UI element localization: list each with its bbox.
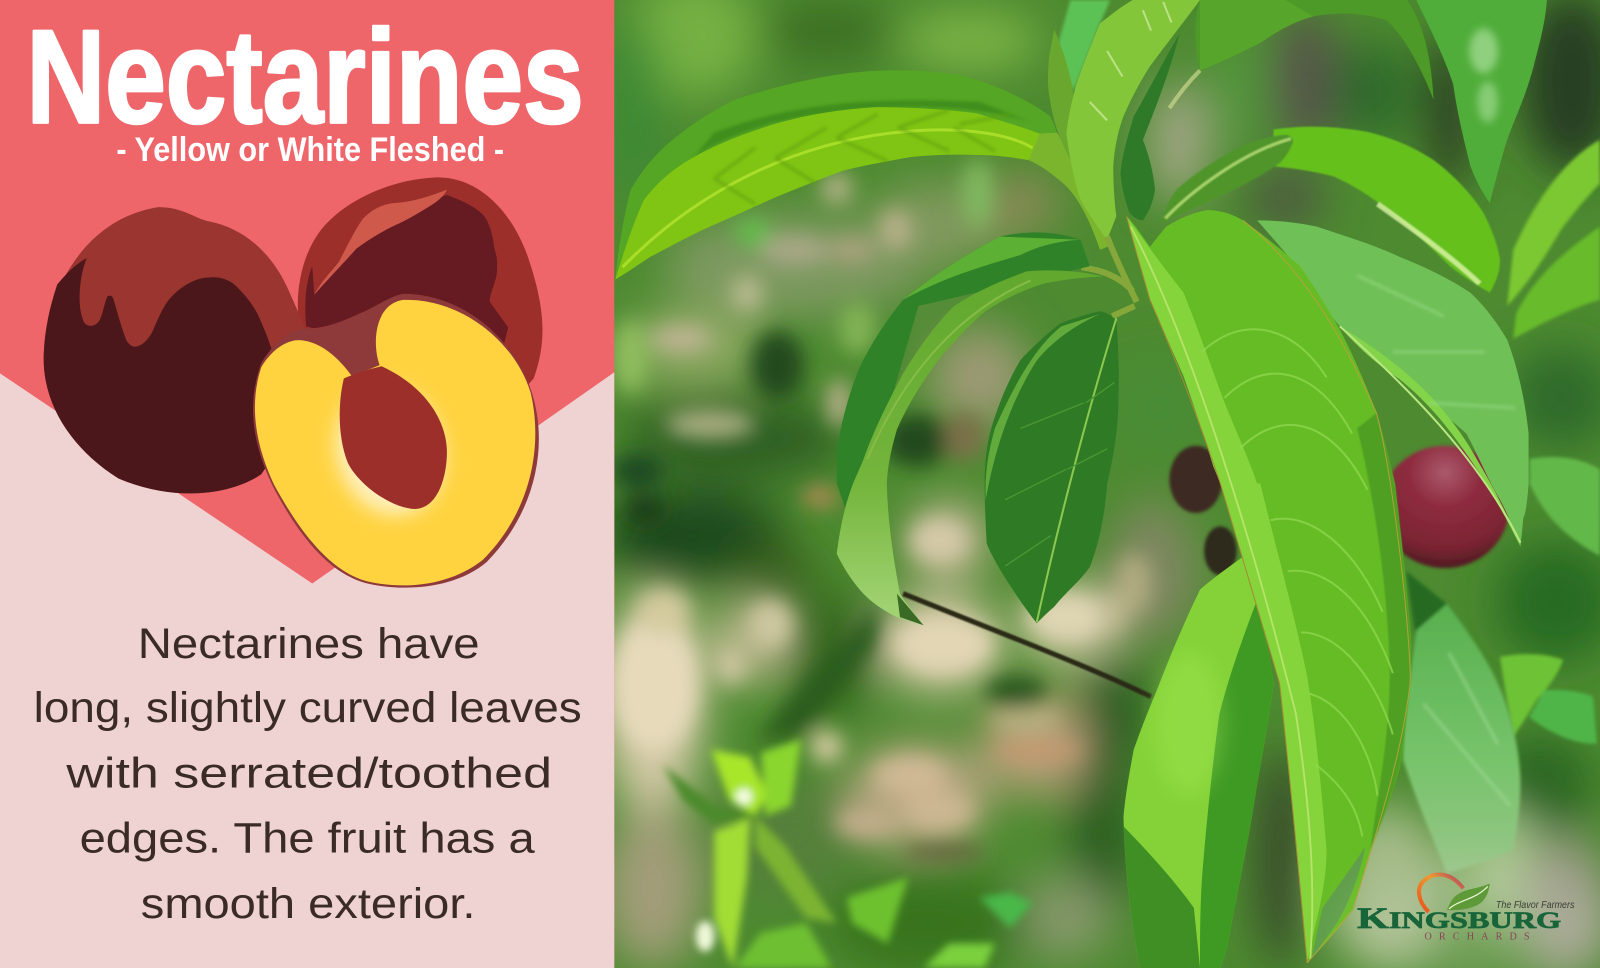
photo: arched leaf centre bbox=[837, 232, 1103, 625]
logo: tagline: The Flavor Farmers bbox=[1496, 900, 1575, 911]
bright lower blade bbox=[615, 107, 1040, 279]
photo: stems bbox=[1082, 237, 1137, 316]
stone bbox=[340, 366, 447, 509]
photo: Kingsburg Orchards logo bbox=[1357, 875, 1575, 942]
photo: top arching leaf bbox=[615, 70, 1112, 279]
body text: with serrated/toothed bbox=[65, 749, 552, 797]
photo: main large leaf bbox=[1127, 210, 1411, 963]
panel: pale pink chevron base bbox=[0, 372, 614, 968]
photo: right edge leaves bbox=[1500, 140, 1600, 744]
logo: sun arc bbox=[1419, 875, 1463, 912]
skin bbox=[253, 294, 539, 588]
flesh glow bbox=[321, 373, 459, 528]
photo: back right leaf bbox=[1257, 220, 1529, 547]
photo: blurred orchard background bbox=[602, 0, 1600, 968]
body text bbox=[34, 620, 582, 928]
flesh bbox=[255, 300, 535, 585]
panel: coral background bbox=[0, 0, 614, 968]
photo: nectarine on branch bbox=[1381, 446, 1509, 568]
midrib strip bbox=[1127, 216, 1327, 963]
title: Nectarines bbox=[27, 3, 584, 151]
icon: right whole nectarine bbox=[298, 177, 542, 428]
photo: soft haze at bottom right bbox=[1347, 872, 1600, 968]
logo: leaf bbox=[1447, 883, 1490, 910]
photo: small blurred leaves lower left bbox=[663, 740, 1033, 968]
body text: smooth exterior. bbox=[141, 880, 476, 928]
body text: Nectarines have bbox=[138, 620, 480, 668]
subtitle: - Yellow or White Fleshed - bbox=[116, 131, 504, 169]
leaf fold behind bbox=[615, 70, 1057, 279]
icon: left whole nectarine bbox=[44, 207, 306, 493]
dark tucked leaf bbox=[1120, 34, 1180, 220]
logo: wordmark: K INGSBURG bbox=[1357, 903, 1561, 935]
photo: leaf with highlight upper right bbox=[1160, 127, 1500, 293]
side veins bbox=[1202, 329, 1393, 836]
logo: orchards: ORCHARDS bbox=[1424, 931, 1530, 942]
icon: halved nectarine bbox=[253, 294, 539, 588]
photo: branch bbox=[903, 594, 1151, 697]
left panel bbox=[0, 0, 614, 968]
body text: edges. The fruit has a bbox=[80, 815, 535, 863]
photo: lower right leaf bbox=[1403, 571, 1520, 873]
body text: long, slightly curved leaves bbox=[34, 684, 582, 732]
photo: dark centre leaf bbox=[985, 311, 1119, 623]
photo: dark background fruit bbox=[1169, 446, 1237, 575]
photo: upright leaf at top centre bbox=[1048, 0, 1200, 240]
photo: top right leaves bbox=[1195, 0, 1547, 203]
right margin shading bbox=[1357, 413, 1411, 850]
photo: bottom centre leaf bbox=[1123, 557, 1273, 968]
stem junction bbox=[1029, 133, 1112, 250]
